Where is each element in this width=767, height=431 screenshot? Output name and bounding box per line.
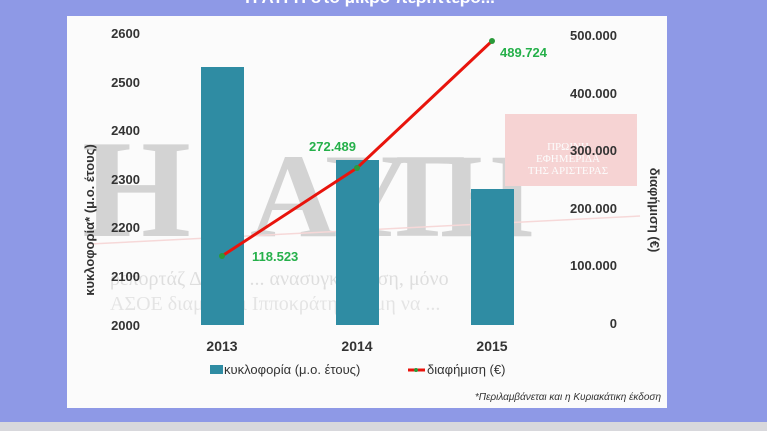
left axis: 2400 — [111, 123, 140, 138]
background newspaper: ΤΗΣ ΑΡΙΣΤΕΡΑΣ — [528, 165, 608, 177]
panel: chart: διαφήμιση (€) — [647, 168, 662, 252]
right axis: 400.000 — [570, 86, 617, 101]
background newspaper — [82, 112, 640, 315]
bottom strip — [0, 422, 767, 431]
left axis: 2000 — [111, 318, 140, 333]
right axis: 300.000 — [570, 143, 617, 158]
legend — [210, 362, 505, 377]
background newspaper: Α — [250, 129, 337, 262]
left axis: 2500 — [111, 75, 140, 90]
background newspaper: ΠΡΩΙΝΗ — [547, 141, 589, 153]
data labels — [252, 45, 548, 264]
footnote: *Περιλαμβάνεται και η Κυριακάτικη έκδοση — [475, 391, 661, 403]
line — [222, 41, 492, 256]
data labels: 489.724 — [500, 45, 548, 60]
right axis: 100.000 — [570, 258, 617, 273]
axis titles: κυκλοφορία* (μ.ο. έτους) — [82, 144, 97, 296]
years: 2014 — [341, 338, 373, 354]
right axis: 0 — [610, 316, 617, 331]
data labels: 118.523 — [252, 249, 298, 264]
background newspaper: Γ — [395, 129, 471, 262]
background newspaper: ΕΦΗΜΕΡΙΔΑ — [536, 153, 600, 165]
right axis — [570, 28, 617, 331]
years: 2013 — [206, 338, 238, 354]
left axis: 2100 — [111, 269, 140, 284]
years — [206, 338, 508, 354]
left axis: 2200 — [111, 220, 140, 235]
data labels: 272.489 — [309, 139, 356, 154]
years: 2015 — [476, 338, 508, 354]
left axis — [111, 26, 140, 333]
background newspaper: Η — [82, 112, 191, 267]
background newspaper: Η — [440, 129, 533, 262]
background newspaper: ρεπορτάζ Δεν θα ... ανασυγκρότηση, μόνο — [110, 268, 449, 290]
background newspaper: ΑΣΟΕ διαμηνύει Ιπποκράτη έτοιμη να ... — [110, 293, 440, 315]
bars — [201, 67, 514, 325]
right axis: 200.000 — [570, 201, 617, 216]
left axis: 2300 — [111, 172, 140, 187]
background newspaper: Υ — [325, 129, 412, 262]
panel: chart — [67, 16, 667, 408]
legend: κυκλοφορία (μ.ο. έτους) — [224, 362, 360, 377]
right axis: 500.000 — [570, 28, 617, 43]
legend: διαφήμιση (€) — [427, 362, 505, 377]
left axis: 2600 — [111, 26, 140, 41]
